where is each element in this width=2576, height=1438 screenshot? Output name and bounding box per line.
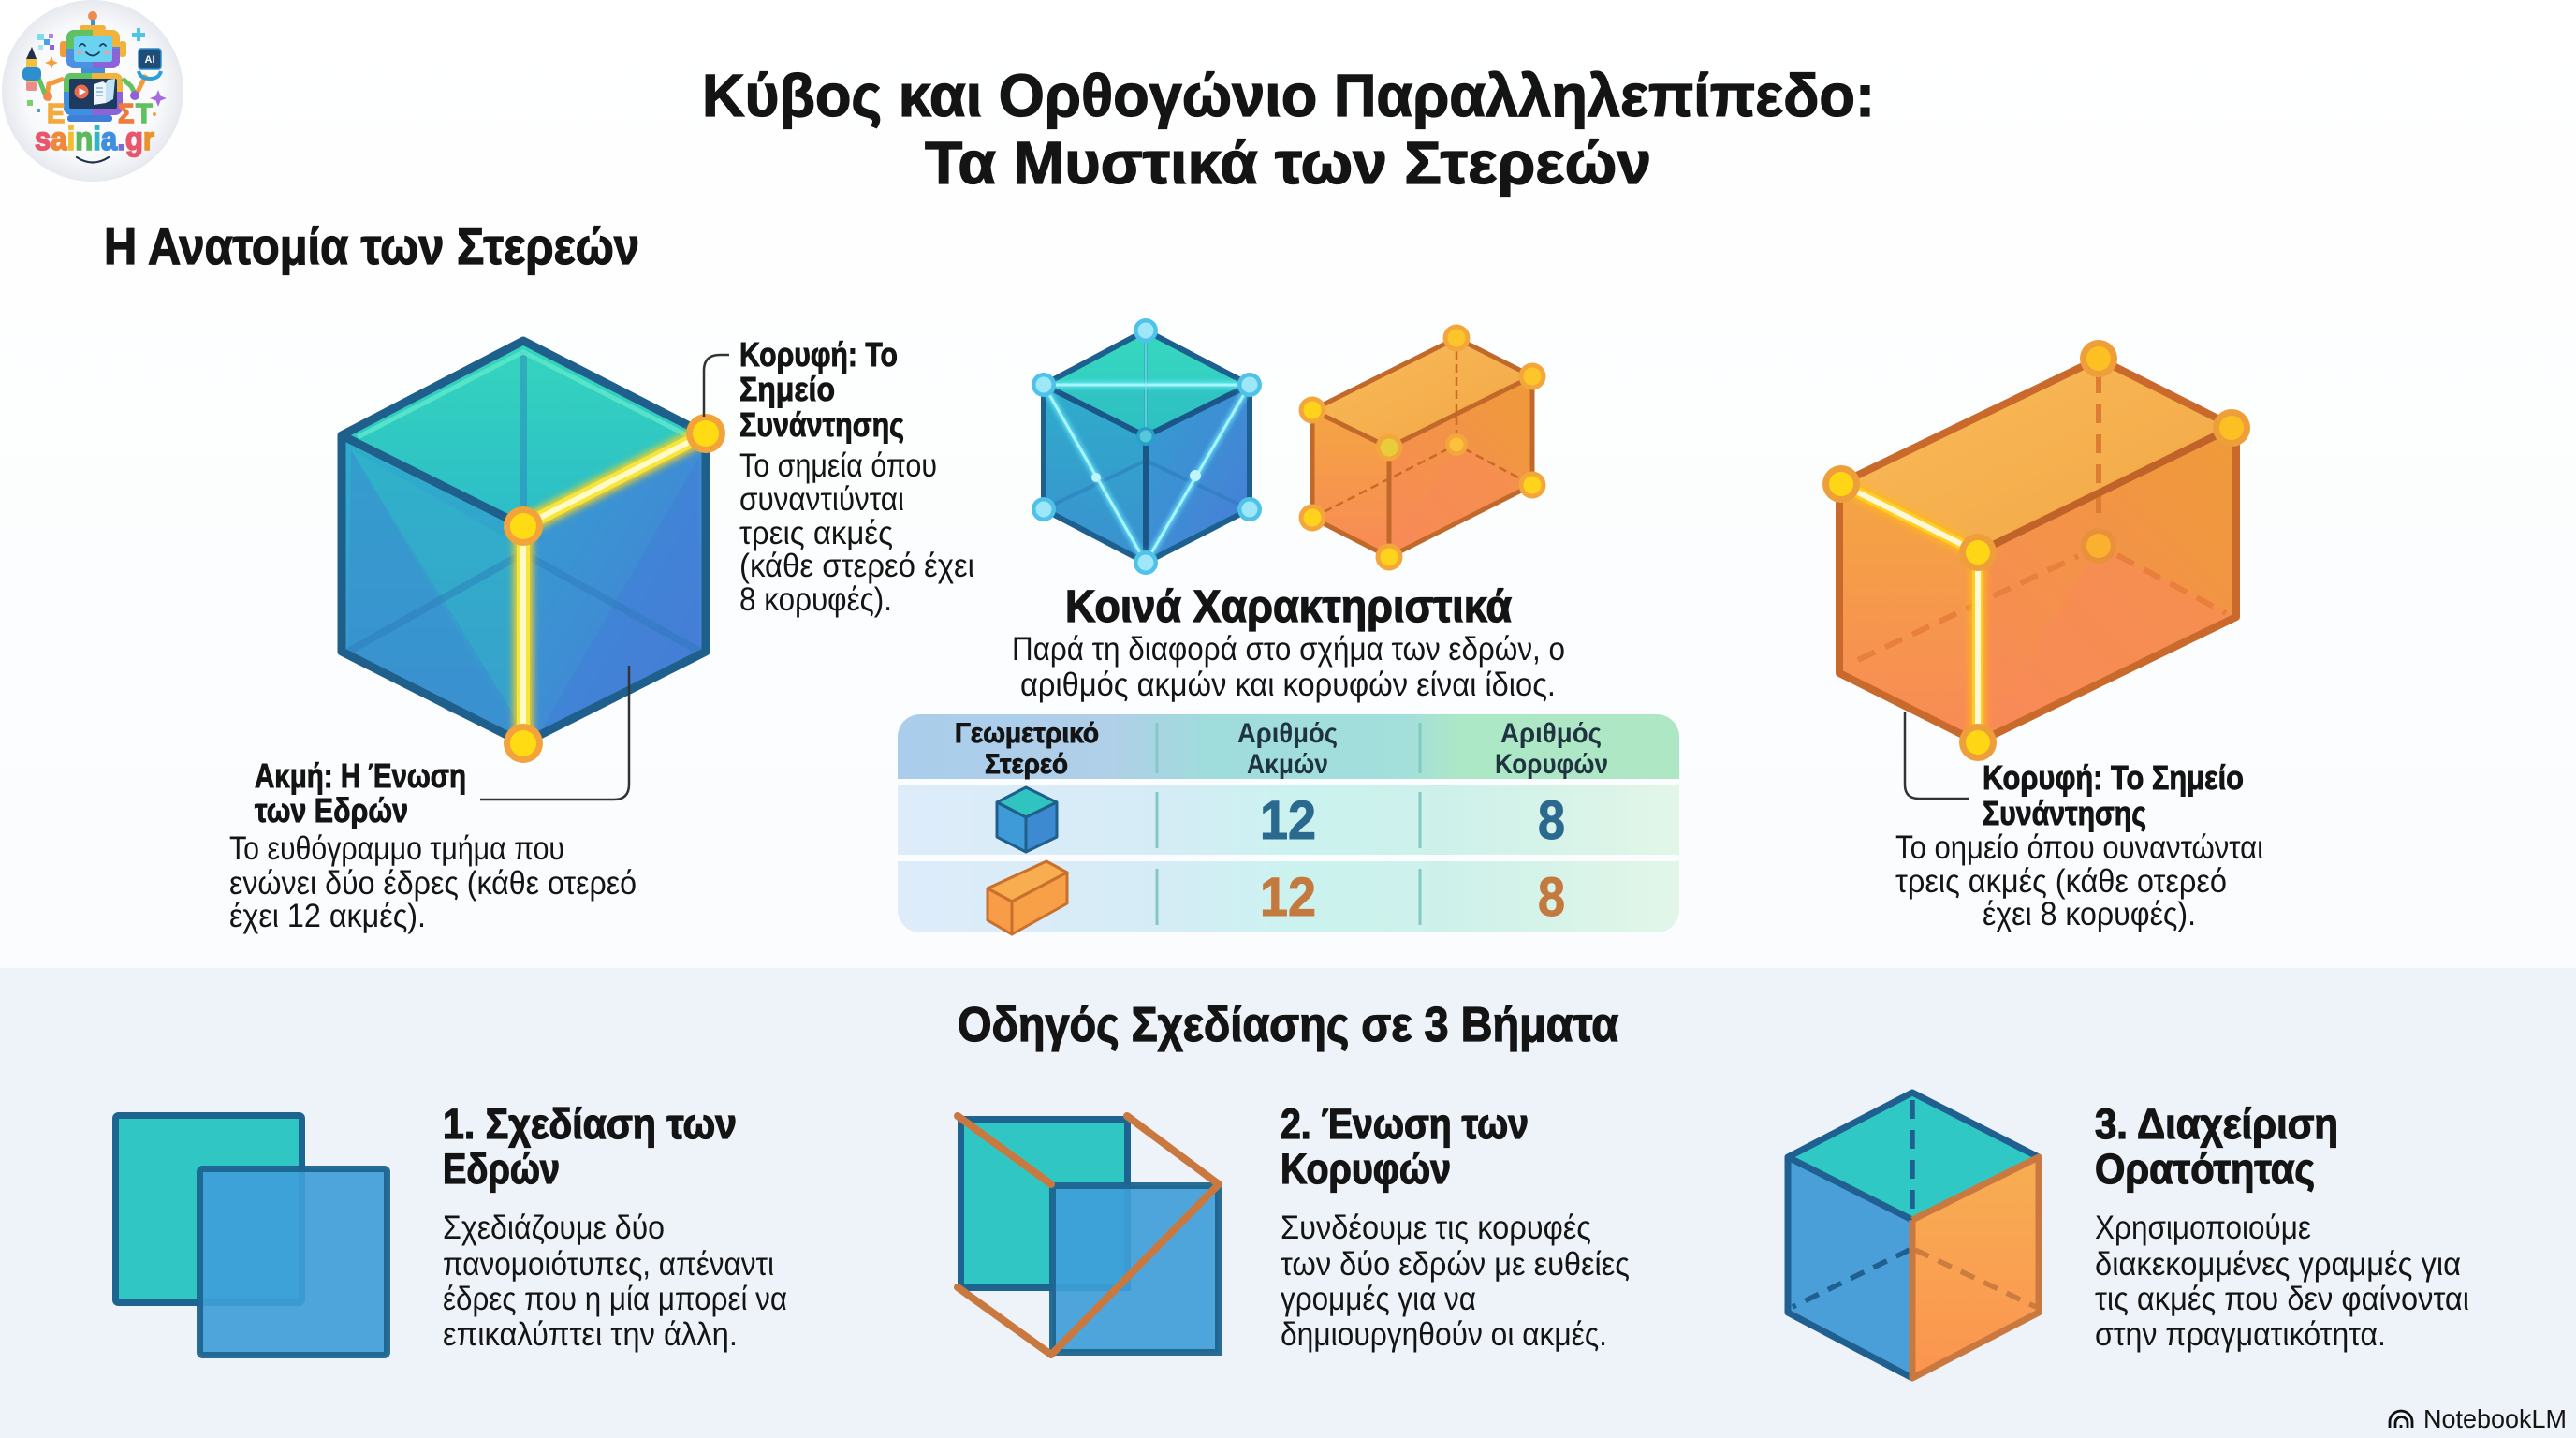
text: step 1: έδρες που η μία μπορεί να [443, 1281, 787, 1317]
logo: sainia.gr robot: AI [144, 54, 155, 66]
icon: step 1 two overlapping faces [116, 1116, 388, 1356]
callout: vertex (cube): Κορυφή: Το [739, 335, 898, 374]
watermark: NotebookLM: NotebookLM [2423, 1404, 2567, 1433]
text: step 2: 2. Ένωση των [1281, 1100, 1529, 1148]
text: step 3: διακεκομμένες γραμμές για [2095, 1246, 2461, 1283]
table: edges and vertices comparison [898, 714, 1679, 934]
heading: 3-step guide: Οδηγός Σχεδίασης σε 3 Βήματα [958, 998, 1618, 1052]
title: Τα Μυστικά των Στερεών [925, 129, 1651, 197]
figure: anatomy cube [342, 341, 725, 763]
text: step 2: Συνδέουμε τις κορυφές [1281, 1210, 1591, 1246]
figure: blue cube with glowing edges [1032, 318, 1262, 575]
callout: vertex (cube): Το σημεία όπου [739, 448, 937, 484]
text: step 2: Κορυφών [1281, 1145, 1451, 1193]
text: step 3: Ορατότητας [2095, 1145, 2315, 1193]
icon: small cube [997, 787, 1057, 852]
text: step 2 [1281, 1100, 1630, 1353]
callout: vertex (box): έχει 8 κορυφές). [1983, 896, 2196, 932]
text: step 1: πανομοιότυπες, απέναντι [443, 1246, 774, 1283]
text: step 2: των δύο εδρών με ευθείες [1281, 1246, 1630, 1283]
callout: vertex (box): Κορυφή: Το Σημείο [1983, 758, 2244, 797]
figure: anatomy rectangular box [1822, 340, 2250, 761]
callout: vertex (cube): Συνάντησης [739, 405, 904, 444]
text: step 2: γρομμές για να [1281, 1281, 1476, 1317]
title: Κύβος και Ορθογώνιο Παραλληλεπίπεδο: [702, 62, 1875, 129]
logo: sainia.gr robot: Ε [47, 99, 65, 129]
text: step 3: στην πραγματικότητα. [2095, 1316, 2386, 1353]
table: edges and vertices comparison: 12 [1260, 867, 1316, 928]
table: edges and vertices comparison: Στερεό [985, 749, 1068, 780]
text: step 1 [443, 1100, 787, 1353]
leader line: right callout [1905, 712, 1969, 799]
leader line: edge callout [480, 666, 629, 800]
callout: vertex (cube): 8 κορυφές). [739, 581, 892, 618]
callout: vertex (cube): συναντιύνται [739, 481, 904, 518]
heading: common characteristics: Κοινά Χαρακτηριστικά [1065, 582, 1512, 632]
text: step 3: 3. Διαχείριση [2095, 1100, 2338, 1148]
table: edges and vertices comparison: 8 [1538, 790, 1565, 851]
text: common characteristics description [1012, 631, 1565, 703]
table: edges and vertices comparison: 8 [1538, 867, 1565, 928]
callout: vertex (box) [1895, 758, 2263, 932]
text: step 1: 1. Σχεδίαση των [443, 1100, 737, 1148]
leader line: vertex callout [704, 355, 729, 417]
text: step 3 [2095, 1100, 2469, 1353]
logo: sainia.gr robot: Σ [118, 99, 134, 129]
table: edges and vertices comparison: Αριθμός [1500, 718, 1602, 749]
text: step 1: Σχεδιάζουμε δύο [443, 1210, 665, 1246]
callout: vertex (cube): (κάθε στερεό έχει [739, 548, 974, 584]
callout: vertex (box): τρεις ακμές (κάθε οτερεό [1895, 863, 2227, 900]
callout: edge: έχει 12 ακμές). [229, 898, 426, 934]
callout: vertex (cube): Σημείο [739, 370, 835, 408]
text: step 1: επικαλύπτει την άλλη. [443, 1316, 738, 1353]
callout: vertex (box): Συνάντησης [1983, 794, 2146, 832]
title [702, 62, 1875, 197]
text: common characteristics description: αριθμός ακμών και κορυφών είναι ίδιος. [1020, 667, 1556, 703]
icon: small box [988, 861, 1067, 934]
icon: step 3 cube with hidden edges [1788, 1093, 2039, 1378]
table: edges and vertices comparison: Αριθμός [1237, 718, 1338, 749]
text: step 3: τις ακμές που δεν φαίνονται [2095, 1281, 2469, 1317]
table: edges and vertices comparison: Γεωμετρικό [955, 718, 1099, 749]
icon: step 2 connected faces [958, 1116, 1219, 1355]
logo: sainia.gr robot: sainia.gr [35, 121, 154, 157]
callout: edge: των Εδρών [255, 791, 408, 829]
text: step 2: δημιουργηθούν οι ακμές. [1281, 1316, 1607, 1353]
callout: edge: Το ευθόγραμμο τμήμα που [229, 830, 564, 867]
panel: bottom guide background [0, 968, 2576, 1438]
text: step 1: Εδρών [443, 1145, 560, 1193]
table: edges and vertices comparison: Ακμών [1247, 749, 1328, 780]
callout: edge: ενώνει δύο έδρες (κάθε οτερεό [229, 865, 637, 902]
figure: orange box [1299, 324, 1546, 571]
logo: sainia.gr robot [2, 0, 183, 182]
text: step 3: Χρησιμοποιούμε [2095, 1210, 2311, 1246]
callout: edge: Ακμή: Η Ένωση [255, 756, 466, 795]
table: edges and vertices comparison: Κορυφών [1495, 749, 1608, 780]
callout: vertex (cube): τρεις ακμές [739, 515, 893, 551]
table: edges and vertices comparison: 12 [1260, 790, 1316, 851]
callout: vertex (box): Το οημείο όπου ουναντώνται [1895, 829, 2263, 866]
callout: edge [229, 756, 637, 934]
text: common characteristics description: Παρά τη διαφορά στο σχήμα των εδρών, ο [1012, 631, 1565, 668]
heading: anatomy: Η Ανατομία των Στερεών [104, 217, 639, 275]
callout: vertex (cube) [739, 335, 974, 618]
logo: sainia.gr robot: Τ [136, 99, 153, 129]
